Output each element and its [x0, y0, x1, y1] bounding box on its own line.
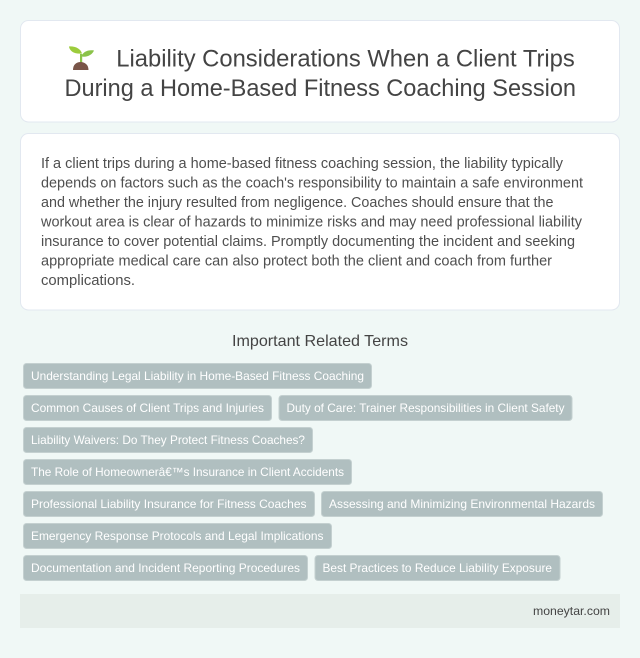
- footer bar: moneytar.com: [533, 604, 610, 618]
- tag: Common Causes of Client Trips and Injuries: [31, 401, 264, 415]
- tag: Understanding Legal Liability in Home-Based Fitness Coaching: [31, 369, 364, 383]
- panel: summary paragraph: workout area is clear of hazards to minimize risks and may need professional liability: [40, 214, 582, 230]
- panel: summary paragraph: and whether the injury resulted from negligence. Coaches should ensure that the: [41, 194, 554, 211]
- tag: [315, 556, 560, 580]
- title: [64, 46, 576, 102]
- tag: Emergency Response Protocols and Legal Implications: [31, 529, 324, 543]
- tag: Documentation and Incident Reporting Procedures: [31, 561, 300, 575]
- panel: summary paragraph: If a client trips during a home-based fitness coaching session, the liability typically: [41, 155, 563, 172]
- panel: summary paragraph: depends on factors such as the coach's responsibility to maintain a safe environment: [41, 174, 584, 192]
- icon: seedling: [69, 46, 94, 70]
- panel: summary paragraph: insurance to cover potential claims. Promptly documenting the incident and seeking: [41, 233, 575, 250]
- tag: [24, 492, 314, 516]
- panel: summary paragraph: [20, 134, 620, 310]
- title: Liability Considerations When a Client Trips: [116, 46, 575, 72]
- tag: [24, 364, 372, 388]
- tag: Assessing and Minimizing Environmental Hazards: [329, 497, 595, 511]
- tag: [24, 460, 352, 484]
- heading: important related terms: Important Related Terms: [232, 333, 408, 350]
- tag: [24, 556, 308, 580]
- title: During a Home-Based Fitness Coaching Session: [64, 75, 576, 102]
- tag: Liability Waivers: Do They Protect Fitness Coaches?: [31, 433, 305, 447]
- footer bar: [20, 594, 620, 628]
- panel: title card: [20, 20, 620, 122]
- tag: Professional Liability Insurance for Fitness Coaches: [31, 497, 306, 511]
- panel: related term tags: [24, 364, 602, 580]
- tag: [24, 396, 272, 420]
- tag: [24, 524, 332, 548]
- tag: [24, 428, 312, 452]
- panel: summary paragraph: complications.: [41, 272, 135, 289]
- panel: summary paragraph: appropriate medical care can also protect both the client and coach from further: [41, 252, 552, 270]
- tag: Duty of Care: Trainer Responsibilities in Client Safety: [286, 401, 564, 415]
- tag: [322, 492, 602, 516]
- tag: [279, 396, 572, 420]
- tag: Best Practices to Reduce Liability Exposure: [322, 561, 552, 575]
- tag: The Role of Homeownerâ€™s Insurance in Client Accidents: [31, 465, 344, 479]
